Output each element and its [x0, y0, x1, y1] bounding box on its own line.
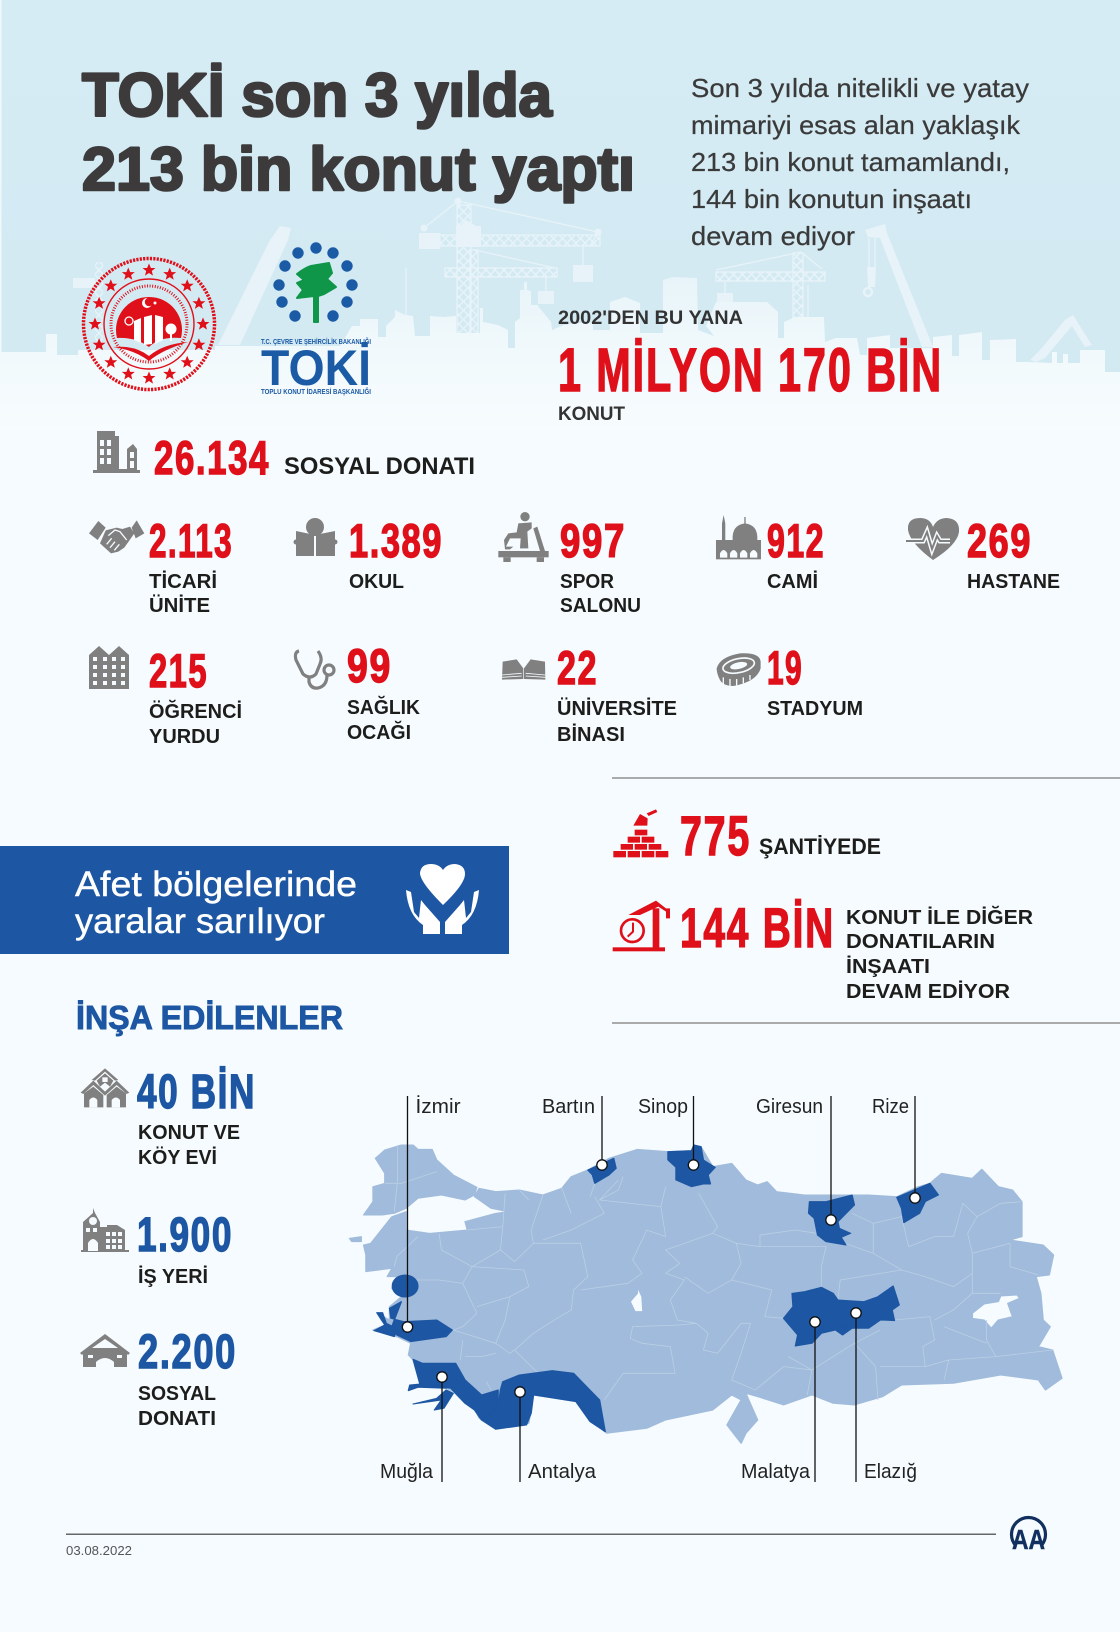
icon: dormitory — [89, 646, 129, 689]
banner: disaster regions — [0, 846, 509, 954]
title — [82, 61, 635, 203]
icon: village houses — [81, 1068, 129, 1107]
icon: heart with pulse — [906, 518, 959, 560]
stat: social facilities — [138, 1326, 237, 1430]
stat: workplaces: İŞ YERİ — [138, 1265, 208, 1288]
stat: construction sites: 775 — [680, 804, 751, 867]
banner: disaster regions: Afet bölgelerinde — [75, 865, 357, 904]
title: TOKİ son 3 yılda — [82, 61, 553, 129]
heading: built: İNŞA EDİLENLER — [76, 999, 343, 1036]
logo: TOKİ: T.C. ÇEVRE VE ŞEHİRCİLİK BAKANLIĞI — [261, 337, 371, 346]
stat: mosques: CAMİ — [767, 570, 818, 593]
emblem: ministry seal — [84, 258, 214, 390]
stat: units under construction: DONATILARIN — [846, 931, 995, 953]
icon: social buildings — [93, 431, 140, 473]
map province labels — [380, 1095, 917, 1483]
headline stat: total housing: 1 MİLYON 170 BİN — [558, 336, 943, 404]
skyline with cranes — [0, 198, 1120, 430]
stat: sports halls: 997 — [560, 514, 626, 567]
stat: units under construction: İNŞAATI — [846, 955, 930, 978]
stat: social facilities total — [154, 431, 475, 484]
stat: workplaces: 1.900 — [137, 1209, 233, 1262]
stat: village houses — [137, 1066, 256, 1169]
stat: commercial units: 2.113 — [149, 514, 233, 567]
icon: treadmill — [498, 512, 549, 562]
map province labels: Antalya — [528, 1461, 597, 1483]
icon: reader — [294, 518, 338, 556]
stat: health clinics — [347, 639, 421, 744]
stat: commercial units: TİCARİ — [149, 570, 217, 593]
logo: TOKİ: TOPLU KONUT İDARESİ BAŞKANLIĞI — [261, 387, 371, 396]
map province labels: Malatya — [741, 1461, 811, 1483]
logo: AA: AA — [1012, 1524, 1045, 1555]
stat: dormitories: YURDU — [149, 726, 220, 748]
headline stat: total housing: 2002'DEN BU YANA — [558, 308, 743, 329]
map province labels: Sinop — [638, 1096, 688, 1118]
title: 213 bin konut yaptı — [82, 135, 635, 203]
stat: hospitals — [967, 514, 1060, 593]
stat: village houses: 40 BİN — [137, 1066, 256, 1119]
map province labels: Bartın — [542, 1096, 595, 1118]
stat: sports halls — [560, 514, 641, 617]
map province labels: Giresun — [756, 1096, 823, 1118]
icon: social facility building — [80, 1334, 130, 1367]
logo: AA — [1012, 1517, 1046, 1555]
stat: dormitories — [149, 644, 242, 748]
stat: units under construction: 144 BİN — [680, 896, 835, 959]
map province labels: Muğla — [380, 1461, 434, 1483]
stat: mosques — [767, 514, 825, 593]
stat: stadiums: 19 — [767, 641, 803, 694]
intro paragraph: Son 3 yılda nitelikli ve yatay — [691, 73, 1029, 103]
stat: university buildings: BİNASI — [557, 723, 625, 746]
headline stat: total housing: KONUT — [558, 404, 625, 425]
stat: health clinics: SAĞLIK — [347, 695, 421, 719]
stat: mosques: 912 — [767, 514, 825, 567]
stat: hospitals: HASTANE — [967, 571, 1060, 593]
stat: commercial units: ÜNİTE — [149, 594, 210, 617]
headline stat: total housing — [558, 308, 943, 425]
date: 03.08.2022 — [66, 1543, 132, 1558]
icon: handshake — [89, 520, 144, 553]
stat: dormitories: 215 — [149, 644, 208, 697]
stat: social facilities: DONATI — [138, 1408, 216, 1430]
icon: bricks and trowel — [613, 809, 668, 857]
stat: university buildings: ÜNİVERSİTE — [557, 697, 677, 720]
stat: units under construction: DEVAM EDİYOR — [846, 980, 1011, 1003]
stat: stadiums: STADYUM — [767, 698, 863, 720]
stat: schools: 1.389 — [349, 514, 443, 567]
stat: university buildings: 22 — [557, 641, 598, 694]
stat: village houses: KÖY EVİ — [138, 1146, 217, 1169]
icon: hands holding heart — [406, 864, 479, 934]
stat: construction sites — [680, 804, 881, 867]
icon: open book — [502, 659, 545, 680]
stat: hospitals: 269 — [967, 514, 1032, 567]
icon: mosque — [716, 515, 761, 559]
stat: schools: OKUL — [349, 571, 404, 593]
stat: sports halls: SPOR — [560, 571, 615, 593]
stat: workplaces — [137, 1209, 233, 1288]
map province labels: Rize — [872, 1096, 909, 1118]
map province labels: İzmir — [416, 1095, 461, 1118]
stat: social facilities total: SOSYAL DONATI — [284, 453, 475, 480]
logo: TOKİ — [261, 242, 371, 396]
logo: TOKİ: TOKİ — [261, 340, 371, 396]
stat: university buildings — [557, 641, 677, 746]
highlighted provinces — [374, 1145, 938, 1432]
icon: stadium — [717, 653, 761, 686]
map province labels: Elazığ — [864, 1461, 917, 1483]
stat: health clinics: 99 — [347, 639, 392, 692]
stat: units under construction: KONUT İLE DİĞER — [846, 905, 1034, 929]
stat: schools — [349, 514, 443, 593]
icon: workplace building — [81, 1208, 129, 1252]
intro paragraph: 213 bin konut tamamlandı, — [691, 147, 1010, 177]
stat: health clinics: OCAĞI — [347, 720, 411, 744]
stat: units under construction — [680, 896, 1034, 1003]
stat: village houses: KONUT VE — [138, 1122, 240, 1144]
map of Türkiye — [349, 1145, 1062, 1443]
intro paragraph: devam ediyor — [691, 221, 855, 251]
stat: social facilities: SOSYAL — [138, 1383, 216, 1405]
stat: social facilities: 2.200 — [138, 1326, 237, 1379]
stat: sports halls: SALONU — [560, 595, 641, 617]
intro paragraph: mimariyi esas alan yaklaşık — [691, 110, 1021, 140]
stat: dormitories: ÖĞRENCİ — [149, 699, 242, 723]
banner: disaster regions: yaralar sarılıyor — [75, 902, 325, 941]
stat: stadiums — [767, 641, 863, 720]
map leader lines and pins — [402, 1096, 920, 1482]
intro paragraph: 144 bin konutun inşaatı — [691, 184, 972, 214]
intro paragraph — [691, 73, 1029, 251]
stat: construction sites: ŞANTİYEDE — [759, 834, 881, 859]
icon: stethoscope — [295, 651, 334, 688]
icon: crane with clock — [613, 901, 670, 951]
stat: commercial units — [149, 514, 233, 617]
stat: social facilities total: 26.134 — [154, 431, 270, 484]
